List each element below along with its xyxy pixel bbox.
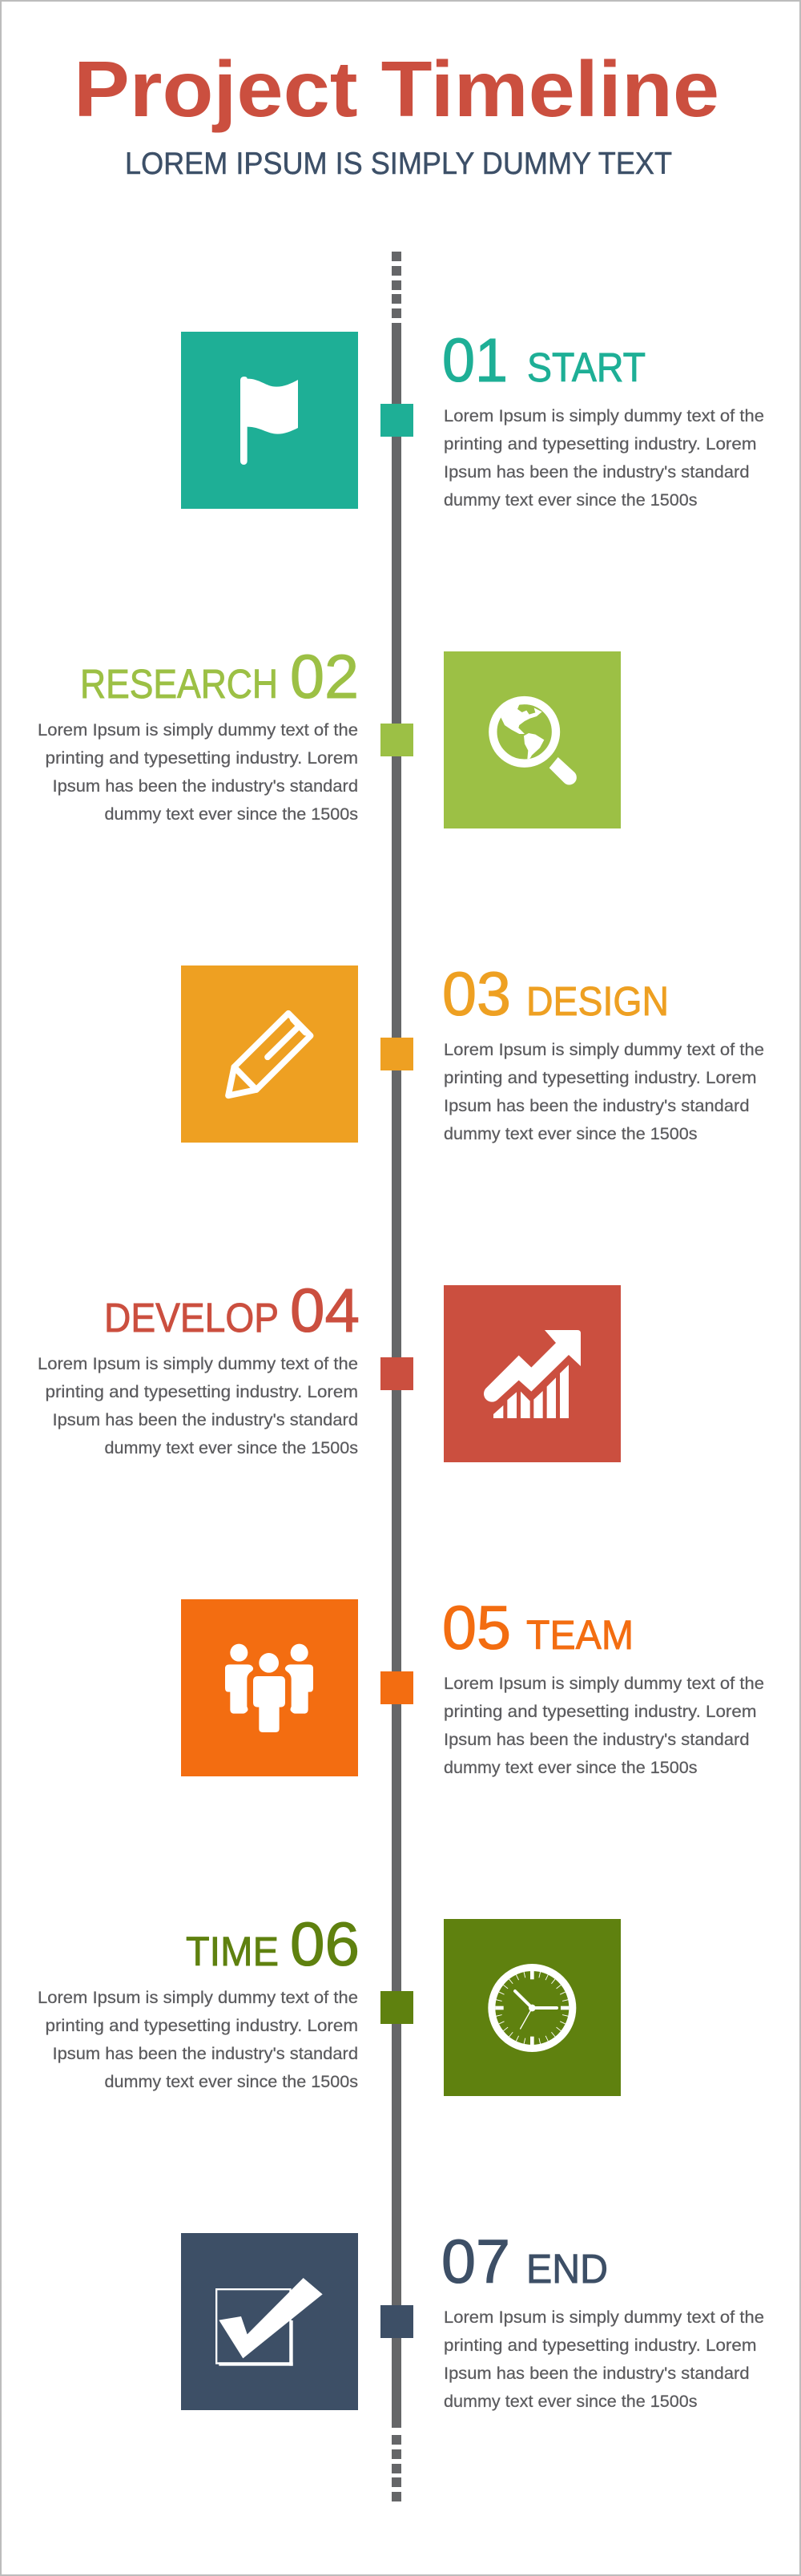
- marker: [380, 2305, 413, 2338]
- description: Ipsum has been the industry's standard: [444, 2364, 750, 2383]
- icon tile: pencil: [181, 965, 358, 1143]
- description: dummy text ever since the 1500s: [444, 1758, 697, 1777]
- description: printing and typesetting industry. Lorem: [444, 1068, 756, 1087]
- heading label: DEVELOP: [104, 1295, 279, 1340]
- description: Ipsum has been the industry's standard: [53, 776, 358, 796]
- step 5: team: [181, 1594, 764, 1777]
- description: dummy text ever since the 1500s: [104, 1438, 358, 1457]
- heading number: 07: [441, 2227, 510, 2296]
- icon tile: clock: [444, 1919, 621, 2096]
- description: Lorem Ipsum is simply dummy text of the: [444, 1674, 764, 1693]
- icon tile: flag: [181, 332, 358, 509]
- step 2: research: [38, 643, 621, 828]
- subtitle: LOREM IPSUM IS SIMPLY DUMMY TEXT: [125, 147, 672, 181]
- icon tile: people: [181, 1599, 358, 1776]
- marker: [380, 1671, 413, 1704]
- title: Project Timeline: [74, 45, 719, 133]
- description: dummy text ever since the 1500s: [104, 804, 358, 824]
- marker: [380, 404, 413, 437]
- description: [38, 1354, 358, 1457]
- icon tile: globe magnifier: [444, 651, 621, 828]
- description: printing and typesetting industry. Lorem: [444, 434, 756, 454]
- marker: [380, 1991, 413, 2024]
- heading label: TIME: [186, 1929, 279, 1974]
- description: printing and typesetting industry. Lorem: [444, 2336, 756, 2355]
- description: printing and typesetting industry. Lorem: [444, 1702, 756, 1721]
- description: Ipsum has been the industry's standard: [444, 1730, 750, 1749]
- step 6: time: [38, 1910, 621, 2096]
- icon tile: checkbox: [181, 2233, 358, 2410]
- description: printing and typesetting industry. Lorem: [45, 1382, 358, 1401]
- description: dummy text ever since the 1500s: [444, 1124, 697, 1143]
- step 7: end: [181, 2227, 764, 2411]
- description: Ipsum has been the industry's standard: [53, 2044, 358, 2063]
- heading label: TEAM: [526, 1612, 634, 1658]
- heading label: RESEARCH: [80, 661, 278, 707]
- description: [38, 1988, 358, 2091]
- heading number: 04: [290, 1276, 360, 1345]
- description: printing and typesetting industry. Lorem: [45, 748, 358, 768]
- description: Lorem Ipsum is simply dummy text of the: [38, 1354, 358, 1373]
- marker: [380, 1038, 413, 1070]
- description: [38, 720, 358, 824]
- heading number: 02: [290, 643, 359, 712]
- heading label: START: [527, 345, 646, 390]
- marker: [380, 1357, 413, 1390]
- description: Ipsum has been the industry's standard: [444, 1096, 750, 1115]
- description: Lorem Ipsum is simply dummy text of the: [444, 1040, 764, 1059]
- heading label: DESIGN: [526, 978, 669, 1024]
- heading label: END: [526, 2246, 608, 2292]
- description: dummy text ever since the 1500s: [444, 2392, 697, 2411]
- description: Lorem Ipsum is simply dummy text of the: [444, 2308, 764, 2327]
- description: [444, 1674, 764, 1777]
- description: dummy text ever since the 1500s: [444, 490, 697, 510]
- description: [444, 406, 764, 510]
- step 4: develop: [38, 1276, 621, 1462]
- heading number: 03: [442, 960, 511, 1029]
- timeline axis: [392, 252, 401, 2501]
- description: Ipsum has been the industry's standard: [53, 1410, 358, 1429]
- icon tile: growth chart: [444, 1285, 621, 1462]
- description: Lorem Ipsum is simply dummy text of the: [444, 406, 764, 425]
- marker: [380, 724, 413, 756]
- description: dummy text ever since the 1500s: [104, 2072, 358, 2091]
- heading number: 05: [442, 1594, 511, 1663]
- description: Lorem Ipsum is simply dummy text of the: [38, 720, 358, 740]
- heading number: 01: [442, 326, 508, 395]
- description: Ipsum has been the industry's standard: [444, 462, 750, 482]
- description: printing and typesetting industry. Lorem: [45, 2016, 358, 2035]
- description: Lorem Ipsum is simply dummy text of the: [38, 1988, 358, 2007]
- description: [444, 2308, 764, 2411]
- step 3: design: [181, 960, 764, 1143]
- description: [444, 1040, 764, 1143]
- heading number: 06: [290, 1910, 360, 1979]
- step 1: start: [181, 326, 764, 510]
